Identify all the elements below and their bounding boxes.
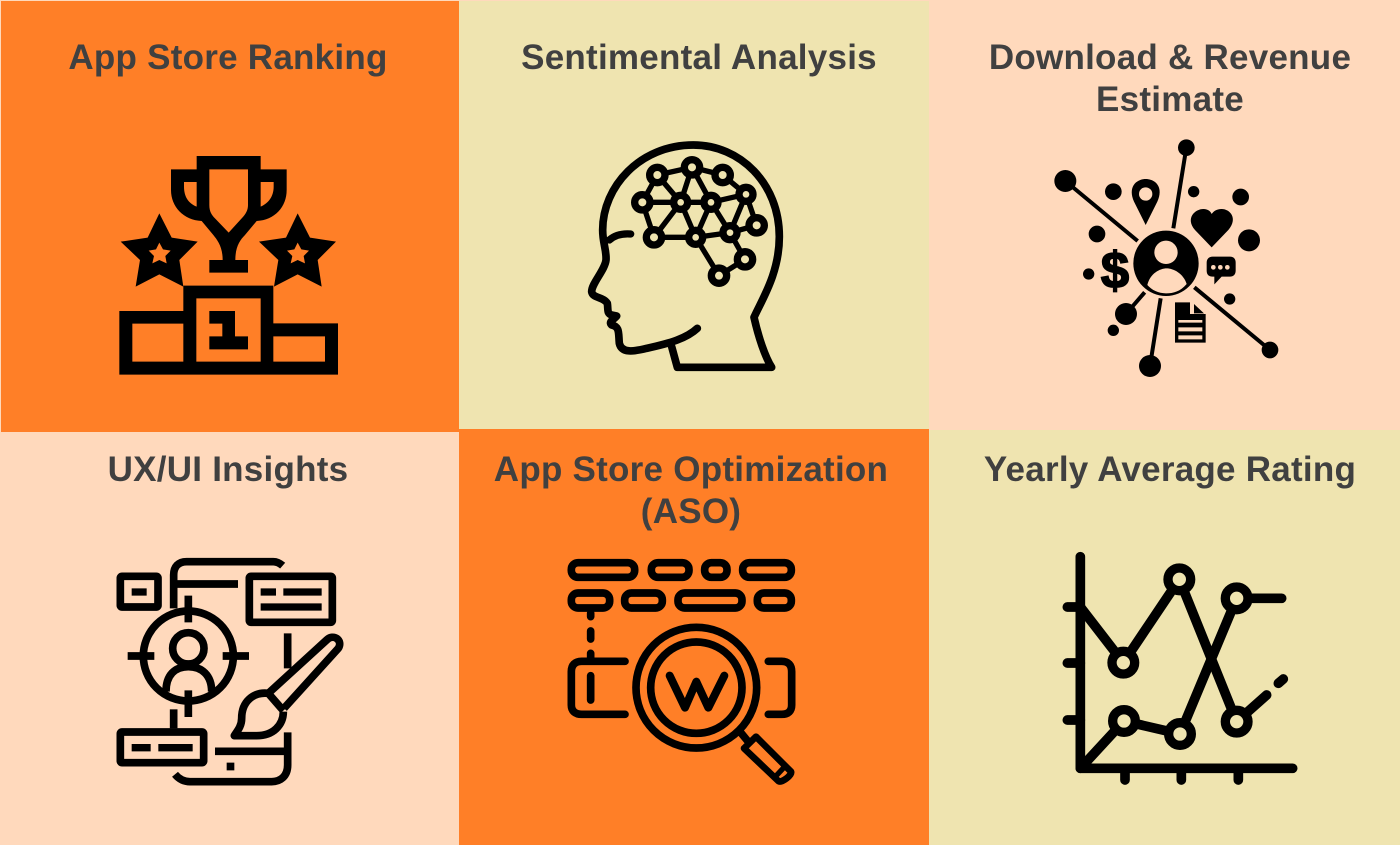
- heading: Download & Revenue Estimate: Download & Revenue: [989, 38, 1351, 77]
- panel: UX/UI Insights: [1, 432, 459, 845]
- heading: App Store Ranking: App Store Ranking: [68, 38, 388, 77]
- icon: line chart: [1067, 557, 1293, 780]
- panel: App Store Optimization (ASO): [459, 429, 929, 845]
- heading: Yearly Average Rating: Yearly Average Rating: [984, 450, 1356, 489]
- panel: Yearly Average Rating: [929, 430, 1400, 845]
- icon: keyword search magnifier: [571, 563, 792, 781]
- icon: target user, paint brush and wireframes: [120, 562, 340, 782]
- panel: App Store Ranking: [1, 1, 459, 432]
- icon: trophy, stars and podium: [119, 156, 338, 375]
- heading: App Store Optimization (ASO): (ASO): [641, 492, 741, 531]
- icon: head with neural network brain: [592, 145, 779, 367]
- heading: Download & Revenue Estimate: Estimate: [1096, 80, 1244, 119]
- heading: UX/UI Insights: UX/UI Insights: [108, 450, 348, 489]
- icon: user network with money, heart and location: [1054, 139, 1278, 377]
- panel: Download & Revenue Estimate: [929, 1, 1400, 430]
- heading: Sentimental Analysis: Sentimental Analysis: [521, 38, 877, 77]
- icon: user network with money, heart and location: $: [1101, 242, 1129, 299]
- panel: Sentimental Analysis: [459, 1, 929, 430]
- heading: App Store Optimization (ASO): App Store Optimization: [494, 450, 888, 489]
